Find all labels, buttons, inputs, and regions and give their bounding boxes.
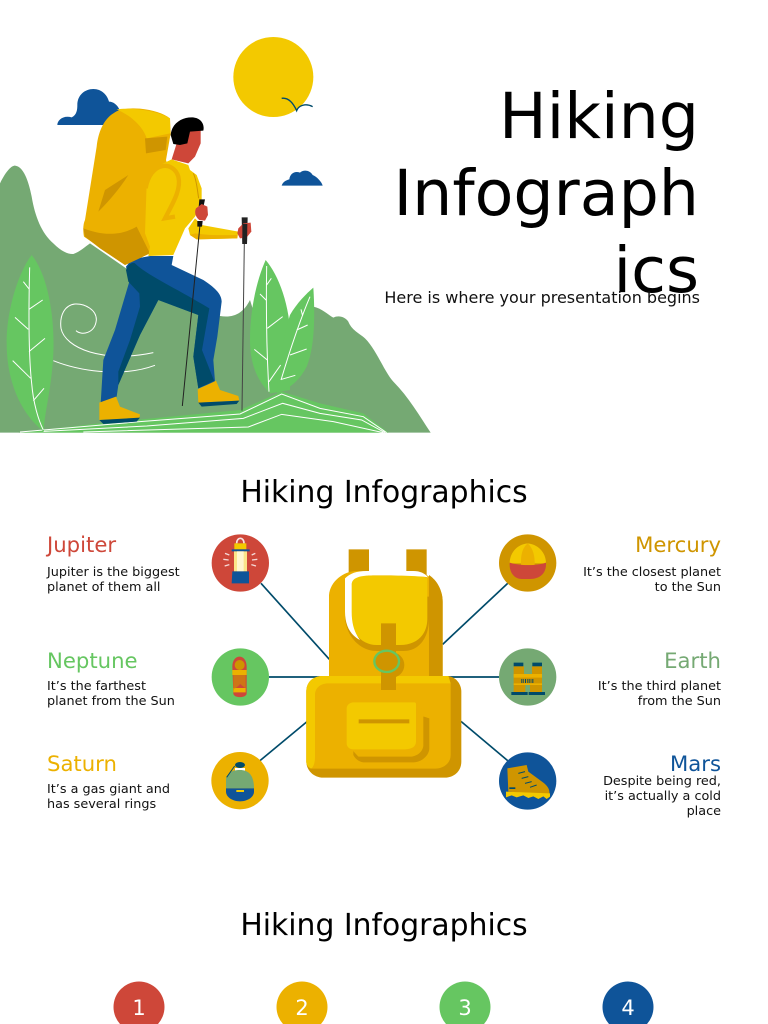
item: Neptune: planet from the Sun xyxy=(47,694,175,709)
item: Mars: Mars xyxy=(670,751,721,776)
pole grip on hand xyxy=(242,224,247,244)
item: Earth: from the Sun xyxy=(638,694,721,709)
item: Jupiter: Jupiter xyxy=(45,532,116,557)
item: Earth: It’s the third planet xyxy=(598,679,721,694)
item: Saturn: It’s a gas giant and xyxy=(47,782,170,797)
item: Mercury xyxy=(583,532,721,595)
item: Neptune: Neptune xyxy=(47,648,138,673)
sun xyxy=(233,37,313,117)
item: Mars: Despite being red, xyxy=(603,774,721,789)
step 4 xyxy=(602,982,654,1024)
leaves right xyxy=(250,260,314,393)
item: Mercury: Mercury xyxy=(635,532,721,557)
item: Mercury: to the Sun xyxy=(655,580,721,595)
hand left xyxy=(195,204,208,221)
boots xyxy=(99,381,239,424)
item: Mars xyxy=(603,751,721,819)
item: Jupiter: Jupiter is the biggest xyxy=(46,565,180,580)
pole right xyxy=(242,217,248,411)
backpack on hiker xyxy=(83,108,173,265)
torso and arm xyxy=(145,159,202,256)
step 4: 4 xyxy=(621,996,635,1020)
step 1: 1 xyxy=(132,996,146,1020)
item: Earth: Earth xyxy=(664,648,721,673)
item: Saturn: Saturn xyxy=(47,751,117,776)
backpack xyxy=(306,549,461,778)
item: Mercury: It’s the closest planet xyxy=(583,565,721,580)
shoulder strap xyxy=(146,166,179,218)
pole left xyxy=(182,199,205,406)
item: Neptune xyxy=(47,648,175,709)
step 1 xyxy=(114,982,164,1024)
item: Neptune: It’s the farthest xyxy=(47,679,146,694)
title xyxy=(393,79,699,307)
step 3: 3 xyxy=(458,996,472,1020)
cloud left xyxy=(57,89,119,125)
step 3 xyxy=(440,982,490,1024)
subtitle: Here is where your presentation begins xyxy=(384,288,700,307)
ground xyxy=(18,392,388,433)
backpack diagram xyxy=(211,534,556,810)
item: Jupiter xyxy=(45,532,180,595)
item: Earth xyxy=(598,648,721,709)
hero illustration: hiker in landscape xyxy=(0,37,431,433)
icon: canteen xyxy=(211,752,269,809)
item: Mars: it’s actually a cold xyxy=(605,789,721,804)
connector lines xyxy=(260,583,508,761)
icon: hat xyxy=(499,534,556,592)
bird xyxy=(282,98,313,111)
title: ics xyxy=(614,233,699,307)
right arm xyxy=(188,218,238,239)
cloud right xyxy=(282,171,323,186)
wind swirl xyxy=(53,304,155,372)
step 2 xyxy=(276,982,328,1024)
item: Mars: place xyxy=(687,804,721,819)
mountains xyxy=(0,166,431,433)
step 2: 2 xyxy=(295,996,309,1020)
item: Saturn xyxy=(47,751,170,812)
item: Saturn: has several rings xyxy=(47,797,156,812)
icon: sleeping bag xyxy=(212,648,269,706)
title: Infograph xyxy=(393,156,699,230)
item: Jupiter: planet of them all xyxy=(47,580,160,595)
hand right xyxy=(237,223,251,238)
icon: boot xyxy=(499,752,556,810)
head and hair xyxy=(171,117,204,163)
side strap xyxy=(193,173,199,198)
pants xyxy=(101,256,222,403)
leaf left xyxy=(7,255,54,432)
heading: section 1: Hiking Infographics xyxy=(240,475,528,510)
icon: binoculars xyxy=(499,648,556,706)
icon: lantern xyxy=(212,534,269,592)
heading: section 2: Hiking Infographics xyxy=(240,908,528,943)
title: Hiking xyxy=(499,79,699,153)
